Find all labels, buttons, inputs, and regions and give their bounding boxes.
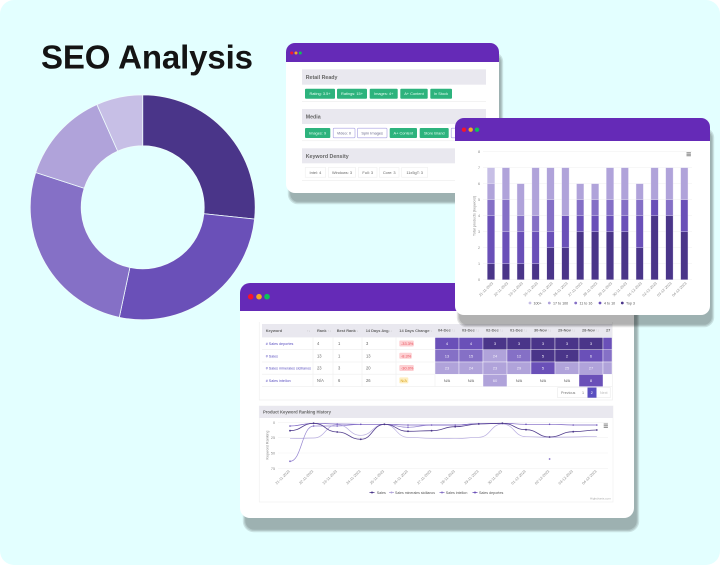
keyword table: 8 xyxy=(590,378,593,383)
pagination: 1 xyxy=(582,391,584,395)
keyword table: Best Rank xyxy=(337,328,357,333)
section: keyword density: Windows: 3 xyxy=(332,170,352,175)
section: media: Spin Images xyxy=(361,130,383,135)
bar chart legend: 100+ xyxy=(534,301,542,305)
line chart legend: Sales deportes xyxy=(479,491,503,495)
series: sales intellon xyxy=(289,423,550,462)
keyword table: N/A xyxy=(564,379,571,383)
keyword table: ↑↓ xyxy=(572,328,575,332)
line chart panel: 26-11-2023 xyxy=(393,469,409,485)
keyword table: 23 xyxy=(445,366,450,371)
line chart panel: 04-12-2023 xyxy=(581,469,598,486)
keyword table: 3 xyxy=(590,341,593,346)
section: retail ready: Rating: 3.5+ xyxy=(309,91,331,96)
panel: keyword ranking window xyxy=(240,283,639,532)
section: retail ready: Ratings: 15+ xyxy=(341,91,364,96)
keyword table: ↑↓ xyxy=(596,328,599,332)
stacked bar chart: 21-11-2023 xyxy=(478,281,494,297)
keyword table: 3 xyxy=(542,341,545,346)
line chart panel: Keyword Ranking xyxy=(266,431,270,459)
keyword table: 6 xyxy=(590,354,593,358)
line chart legend: Sales xyxy=(377,491,386,495)
section: retail ready: A+ Content xyxy=(404,91,425,96)
keyword table: -30.0% xyxy=(401,366,414,371)
keyword table: 1 xyxy=(338,353,341,358)
section: media: Store Brand xyxy=(424,130,445,135)
keyword table: 20 xyxy=(366,366,371,371)
section: retail ready xyxy=(302,69,486,102)
keyword table: # Sales intellon xyxy=(266,379,291,383)
pagination: Previous xyxy=(561,391,576,395)
bar chart legend: 4 to 10 xyxy=(604,301,615,305)
keyword table: 23 xyxy=(317,366,322,371)
stacked bar chart: 30-11-2023 xyxy=(612,281,628,297)
line chart panel: 02-12-2023 xyxy=(534,469,550,486)
keyword table: Rank xyxy=(317,328,327,333)
stacked bar chart: 4 xyxy=(478,214,480,218)
line chart panel: 21-11-2023 xyxy=(275,469,291,485)
keyword table: 4 xyxy=(317,341,320,346)
line chart panel: 01-12-2023 xyxy=(511,469,527,486)
section: retail ready: Retail Ready xyxy=(306,75,338,81)
keyword table: 01-Dec xyxy=(510,328,524,332)
section: keyword density: Core: 3 xyxy=(383,170,396,175)
keyword table: # Sales minerales sicilianos xyxy=(266,367,311,371)
keyword table: 14 Days Avg. xyxy=(366,328,390,333)
section: keyword density: Full: 3 xyxy=(362,170,373,175)
line chart panel: 50 xyxy=(271,452,275,456)
stacked bar chart: 23-11-2023 xyxy=(508,281,524,297)
keyword table: ↑↓ xyxy=(548,328,551,332)
keyword table: -8.3% xyxy=(401,353,412,358)
stacked bar chart: 26-11-2023 xyxy=(553,281,569,297)
keyword table: 12 xyxy=(517,354,522,358)
line chart panel: 24-11-2023 xyxy=(346,469,362,485)
stacked bar chart: 28-11-2023 xyxy=(582,281,598,297)
line chart panel: 27-11-2023 xyxy=(416,469,432,485)
section: retail ready: Images: 4+ xyxy=(374,91,394,96)
stacked bar chart: Total products (keyword) xyxy=(472,196,476,236)
keyword table: ↑↓ xyxy=(524,328,527,332)
keyword table: 04-Dec xyxy=(438,328,452,332)
keyword table: 5 xyxy=(542,354,545,358)
window header bar xyxy=(455,118,710,141)
keyword table: 4 xyxy=(470,341,473,346)
line chart panel: 75 xyxy=(271,467,275,471)
keyword table: 24 xyxy=(493,354,498,358)
window header bar xyxy=(286,43,499,62)
stacked bar chart: 7 xyxy=(478,166,480,170)
line chart panel: 25-11-2023 xyxy=(369,469,385,485)
keyword table: Keyword xyxy=(266,328,283,333)
keyword table: 26 xyxy=(366,378,371,383)
series: sales deportes xyxy=(289,422,598,427)
stacked bar chart: 24-11-2023 xyxy=(523,281,539,297)
keyword table: 24 xyxy=(469,366,474,371)
stacked bar chart xyxy=(472,150,692,305)
keyword table: 1 xyxy=(338,341,341,346)
stacked bar chart: 25-11-2023 xyxy=(538,281,554,297)
title: SEO Analysis xyxy=(41,38,253,76)
section: media: Video: 0 xyxy=(337,130,352,135)
line chart panel: 23-11-2023 xyxy=(322,469,338,485)
stacked bar chart: 1 xyxy=(478,262,480,266)
series: sales minerales sicilianos xyxy=(290,424,597,439)
section: keyword density: Keyword Density xyxy=(306,154,349,160)
section: media: Media xyxy=(306,115,321,121)
keyword table: 02-Dec xyxy=(486,328,500,332)
line chart panel: Product Keyword Ranking History xyxy=(263,410,332,415)
keyword table: ↑↓ xyxy=(429,329,433,333)
stacked bar chart: 29-11-2023 xyxy=(597,281,613,297)
section: media: Images: 9 xyxy=(309,130,326,135)
keyword table: ↑↓ xyxy=(500,328,503,332)
bar chart legend: Top 3 xyxy=(626,301,635,305)
keyword table: 3 xyxy=(494,341,497,346)
stacked bar chart: 04-12-2023 xyxy=(671,281,688,298)
section: media: A+ Content xyxy=(394,130,414,135)
panel: stacked bar window xyxy=(455,118,714,327)
line chart panel: 28-11-2023 xyxy=(440,469,456,485)
stacked bar chart: 2 xyxy=(478,246,480,250)
stacked bar chart: 8 xyxy=(478,150,480,154)
window control dots xyxy=(462,128,479,132)
bar chart legend: 17 to 100 xyxy=(553,301,568,305)
keyword table: N/A xyxy=(317,378,324,383)
keyword table: 3 xyxy=(566,341,569,346)
keyword table: 3 xyxy=(518,341,521,346)
keyword table: 13 xyxy=(317,353,322,358)
section: media xyxy=(302,109,486,141)
keyword table: 3 xyxy=(338,366,341,371)
credit: Highcharts.com xyxy=(590,496,611,500)
line chart panel: 03-12-2023 xyxy=(558,469,574,486)
keyword table: 15 xyxy=(469,354,474,358)
window control dots xyxy=(290,52,302,54)
section: keyword density xyxy=(302,148,486,181)
section: keyword density: Intel: 4 xyxy=(310,170,322,175)
keyword table: 27 xyxy=(589,366,594,371)
keyword table: 29 xyxy=(517,366,522,371)
panel: retail ready window xyxy=(286,43,503,204)
keyword table: -33.3% xyxy=(401,341,414,346)
keyword table: ↑↓ xyxy=(307,329,311,333)
keyword table: 27 xyxy=(606,328,610,332)
line chart panel: 22-11-2023 xyxy=(298,469,314,485)
pagination: 2 xyxy=(591,391,593,395)
line chart legend xyxy=(370,491,503,495)
stacked bar chart: 6 xyxy=(478,182,480,186)
stacked bar chart: 27-11-2023 xyxy=(567,281,583,297)
line chart panel: 29-11-2023 xyxy=(464,469,480,485)
keyword table: 25 xyxy=(565,366,570,371)
keyword table: ↑↓ xyxy=(388,329,392,333)
keyword table: 5 xyxy=(542,366,545,371)
bar chart legend: 11 to 16 xyxy=(580,301,592,305)
stacked bar chart: 5 xyxy=(478,198,480,202)
heatmap cells xyxy=(435,338,612,387)
bar chart legend xyxy=(529,301,635,305)
window control dots xyxy=(248,294,270,300)
stacked bar chart: 22-11-2023 xyxy=(493,281,509,297)
donut chart xyxy=(30,95,255,320)
keyword table: 3 xyxy=(366,341,369,346)
line chart panel: 0 xyxy=(273,421,275,425)
keyword table: N/A xyxy=(516,379,523,383)
icon: chart menu xyxy=(604,424,608,427)
keyword table xyxy=(259,322,612,400)
line chart panel: 30-11-2023 xyxy=(487,469,503,485)
keyword table: ↑↓ xyxy=(355,329,359,333)
line chart panel xyxy=(259,406,613,502)
keyword table: 03-Dec xyxy=(462,328,476,332)
window header bar xyxy=(240,283,634,311)
keyword table: 13 xyxy=(366,353,371,358)
keyword table: N/A xyxy=(400,378,407,383)
stacked bar chart: 3 xyxy=(478,230,480,234)
stacked bar chart: 02-12-2023 xyxy=(642,281,658,298)
keyword table: # Sales deportes xyxy=(266,342,294,346)
keyword table: ↑↓ xyxy=(476,328,479,332)
keyword table: 4 xyxy=(446,341,449,346)
keyword table: # Sales xyxy=(266,354,278,358)
pagination: Next xyxy=(600,391,608,395)
icon: chart menu xyxy=(686,153,691,156)
keyword table: 23 xyxy=(493,366,498,371)
keyword table: ↑↓ xyxy=(328,329,331,333)
keyword table: N/A xyxy=(444,379,451,383)
stacked bar chart: 01-12-2023 xyxy=(627,281,643,298)
keyword table: 13 xyxy=(445,354,450,358)
line chart legend: Sales minerales sicilianos xyxy=(395,491,435,495)
series: sales xyxy=(289,422,598,440)
keyword table: 29-Nov xyxy=(558,328,572,332)
keyword table: 30-Nov xyxy=(534,328,548,332)
section: keyword density: 11x5gT: 3 xyxy=(406,170,423,175)
line chart panel: 25 xyxy=(271,436,275,440)
stacked bar chart: 03-12-2023 xyxy=(656,281,673,298)
keyword table: 2 xyxy=(566,354,569,358)
keyword table: ↑↓ xyxy=(452,328,455,332)
line chart legend: Sales intellon xyxy=(446,491,467,495)
stacked bar chart: 0 xyxy=(478,278,480,282)
keyword table: 6 xyxy=(338,378,341,383)
section: retail ready: In Stock xyxy=(434,91,448,96)
keyword table: N/A xyxy=(540,379,547,383)
keyword table: 60 xyxy=(493,378,498,383)
pagination xyxy=(558,388,610,398)
keyword table: N/A xyxy=(468,379,475,383)
keyword table: 28-Nov xyxy=(582,328,596,332)
keyword table: 14 Days Change xyxy=(399,328,430,333)
